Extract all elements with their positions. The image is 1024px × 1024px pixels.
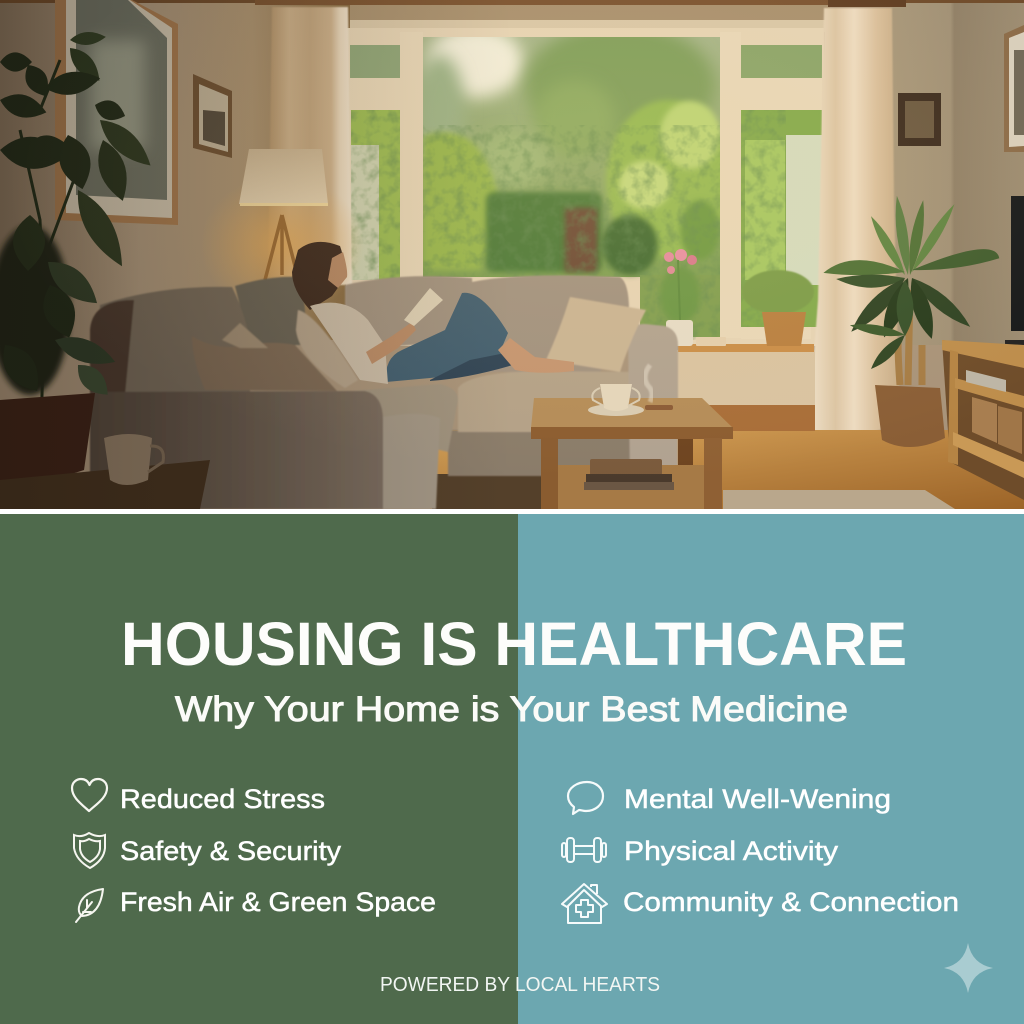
terracotta pot [0, 393, 95, 481]
jeans [386, 293, 508, 382]
hero photo: woman reading on a sofa in a sunlit living room [0, 0, 1024, 509]
item: reduced stress: Reduced Stress [120, 784, 325, 814]
TV stand with baskets [942, 340, 1024, 500]
textured pillow behind woman [296, 310, 358, 388]
table top [531, 398, 733, 428]
books on sill [696, 337, 726, 346]
panel: green left half [0, 514, 518, 1024]
item: physical activity: Physical Activity [624, 836, 839, 866]
window bars [350, 32, 822, 339]
icon: dumbbell [562, 838, 606, 862]
item: physical activity [562, 836, 839, 866]
open book [404, 288, 443, 326]
icon: sparkle [944, 943, 993, 993]
steam [645, 365, 652, 402]
brown pillow [192, 336, 337, 391]
icon: shield [74, 833, 105, 868]
floor [430, 430, 1024, 509]
left plant [0, 30, 158, 470]
item: fresh air and green space: Fresh Air & Green Space [120, 887, 436, 917]
white flower pot [666, 320, 693, 346]
woman reading [292, 242, 574, 384]
cup and saucer [588, 384, 644, 416]
lamp shade [239, 149, 328, 204]
wall below window sill [675, 344, 815, 431]
foot [498, 338, 574, 373]
list: right column [562, 782, 959, 923]
right curtain [808, 0, 906, 435]
window plants [660, 249, 814, 346]
item: community and connection: Community & Connection [623, 887, 959, 917]
TV [1005, 196, 1024, 346]
flower stems [660, 249, 700, 323]
room walls [0, 0, 1024, 509]
warm light overlay [0, 0, 1024, 509]
right wall frames [898, 25, 1024, 152]
face [328, 252, 347, 288]
stems [898, 290, 922, 385]
small framed picture [193, 74, 232, 158]
foliage texture [351, 110, 786, 340]
center seats [340, 384, 458, 509]
item: mental well-wening: Mental Well-Wening [624, 784, 891, 814]
forearm [366, 322, 416, 364]
back cushions [90, 275, 629, 400]
rug [723, 490, 955, 509]
lamp glow and lamp [200, 149, 364, 315]
right cream pillow [546, 297, 646, 372]
wicker basket [875, 385, 945, 447]
window sill [678, 344, 814, 352]
lower shelf [558, 465, 704, 509]
window with garden view [346, 23, 825, 346]
large framed picture [55, 0, 178, 225]
side panes [350, 45, 822, 327]
icon: heart [72, 779, 107, 811]
sofa [90, 275, 678, 509]
item: safety and security [74, 833, 342, 868]
tripod [265, 215, 298, 280]
side table [0, 460, 210, 509]
dense dark foliage [0, 225, 70, 395]
saucer object [645, 405, 673, 410]
icon: house with medical cross [562, 884, 607, 923]
left curtain [268, 7, 352, 285]
panel: teal right half [518, 514, 1024, 1024]
front block [90, 391, 383, 509]
sweater [310, 303, 388, 384]
far leg [678, 438, 693, 466]
right plant [823, 195, 1000, 447]
item: safety and security: Safety & Security [120, 836, 342, 866]
potted herb [742, 270, 814, 346]
stack of books [584, 459, 674, 490]
list: left column [72, 779, 436, 922]
title: HOUSING IS HEALTHCARE [121, 610, 907, 678]
subtitle: Why Your Home is Your Best Medicine [175, 690, 848, 729]
hair [292, 242, 344, 310]
item: mental well-wening [568, 782, 891, 814]
footer credit: POWERED BY LOCAL HEARTS [380, 974, 660, 996]
right section [448, 324, 678, 476]
icon: speech bubble [568, 782, 603, 814]
fronds [823, 195, 1000, 373]
garden main pane [415, 23, 730, 337]
small cream pillow [222, 323, 268, 348]
item: community and connection [562, 884, 959, 923]
coffee table [531, 365, 733, 509]
icon: leaf [76, 889, 103, 922]
mug on side table [104, 434, 163, 485]
item: reduced stress [72, 779, 325, 814]
